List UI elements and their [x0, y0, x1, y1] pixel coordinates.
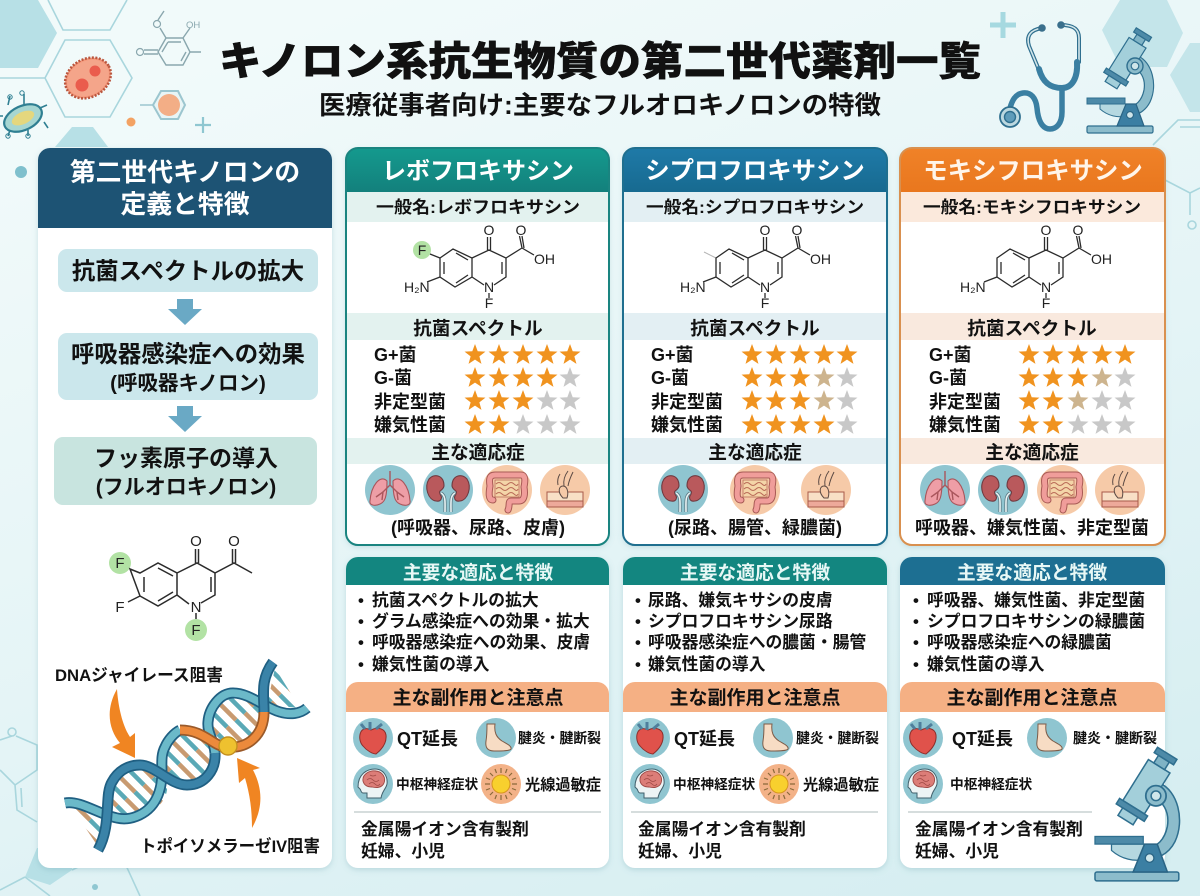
card border [623, 148, 887, 545]
arrow: gyrase target [110, 689, 135, 758]
feature list: シプロフロキサシン尿路 [648, 612, 833, 631]
section: main indications [346, 438, 609, 464]
section: main indications: 主な適応症 [431, 442, 525, 463]
label: DNA gyrase inhibition: DNAジャイレース阻害 [55, 665, 223, 685]
feature list: 嫌気性菌の導入 [927, 655, 1045, 674]
star ratings: 嫌気性菌 [929, 414, 1001, 435]
decoration: top-right hexagons and molecule lines [990, 0, 1200, 229]
arrow [168, 406, 202, 432]
side effect: photosensitivity: 光線過敏症 [525, 776, 601, 794]
card border [900, 148, 1165, 545]
chemical structure: O [484, 222, 495, 238]
panel: levofloxacin indications and side effects [346, 557, 609, 868]
chemical structure: fluoroquinolone: O [228, 533, 240, 550]
chemical structure: O [516, 222, 527, 238]
precautions [361, 819, 529, 861]
chemical structure: F [761, 295, 769, 311]
precautions [915, 819, 1083, 861]
indication caption: 呼吸器、嫌気性菌、非定型菌 [915, 517, 1149, 538]
feature list: • [358, 612, 364, 631]
feature list: 呼吸器、嫌気性菌、非定型菌 [927, 591, 1145, 610]
indication caption: (呼吸器、尿路、皮膚) [391, 518, 565, 538]
feature list: • [913, 612, 919, 631]
icon: microscope lower right [1095, 745, 1181, 881]
chemical structure: N [760, 279, 770, 295]
generic name: 一般名:モキシフロキサシン [923, 198, 1141, 217]
subtitle: 医療従事者向け:主要なフルオロキノロンの特徴 [319, 92, 882, 120]
feature list [358, 591, 590, 674]
chemical structure: H₂N [404, 279, 430, 295]
panel: moxifloxacin [900, 148, 1165, 545]
panel: ciprofloxacin [623, 148, 887, 545]
side effect: tendon rupture: 腱炎・腱断裂 [518, 730, 601, 746]
chemical structure: O [792, 222, 803, 238]
heading: side effects: 主な副作用と注意点 [946, 687, 1118, 709]
section: antibacterial spectrum [623, 313, 887, 340]
chemical structure [680, 222, 831, 311]
generic name [623, 192, 887, 222]
heading: indications [900, 557, 1165, 585]
panel: levofloxacin [346, 148, 609, 545]
star ratings: G+菌 [374, 345, 417, 365]
heading: side effects: 主な副作用と注意点 [392, 687, 564, 709]
DNA helix diagram [64, 658, 310, 853]
section: main indications: 主な適応症 [708, 442, 802, 463]
drug name header [900, 148, 1165, 192]
star ratings: G-菌 [929, 368, 967, 388]
arrow: topoisomerase target [237, 758, 260, 828]
feature list: 呼吸器感染症への効果、皮膚 [372, 632, 590, 652]
side effect: tendon rupture: 腱炎・腱断裂 [1073, 730, 1157, 746]
side effect: photosensitivity: 光線過敏症 [803, 776, 879, 794]
panel heading: 定義と特徴 [120, 190, 250, 219]
precautions: 妊婦、小児 [361, 842, 445, 861]
card border [346, 148, 609, 545]
feature list: • [635, 655, 641, 674]
star ratings: 非定型菌 [651, 392, 723, 412]
drug name header [623, 148, 887, 192]
feature list: • [635, 633, 641, 652]
heading: side effects [346, 682, 609, 712]
precautions: 金属陽イオン含有製剤 [915, 819, 1083, 839]
box: spectrum expansion: 抗菌スペクトルの拡大 [72, 258, 304, 284]
feature list: 尿路、嫌気キサシの皮膚 [648, 590, 833, 610]
generic name [346, 192, 609, 222]
side effect: QT prolongation [353, 718, 458, 758]
chemical structure: fluoroquinolone: O [190, 533, 202, 550]
side effect: QT prolongation [903, 718, 1013, 758]
star ratings [651, 344, 857, 435]
feature list: 嫌気性菌の導入 [648, 655, 766, 674]
generic name: 一般名:レボフロキサシン [376, 198, 580, 217]
heading: side effects [900, 682, 1165, 712]
chemical structure [960, 222, 1112, 311]
decoration: bottom-left hexagons and molecule lines [0, 728, 140, 896]
drug name header: シプロフロキサシン [645, 158, 865, 185]
feature list: • [913, 591, 919, 610]
feature list [635, 590, 866, 674]
box: respiratory effect: (呼吸器キノロン) [110, 372, 266, 395]
indication icons [365, 465, 590, 515]
heading: indications [623, 557, 887, 585]
indication caption: (尿路、腸管、緑膿菌) [668, 517, 842, 538]
section: main indications [623, 438, 887, 464]
box: fluorine introduction: (フルオロキノロン) [96, 476, 276, 499]
feature list: • [358, 591, 364, 610]
precautions: 金属陽イオン含有製剤 [361, 819, 529, 839]
precautions [638, 819, 806, 861]
heading: side effects: 主な副作用と注意点 [669, 687, 841, 709]
heading: indications: 主要な適応と特徴 [680, 562, 830, 583]
box: fluorine introduction [54, 437, 317, 505]
indication icons [920, 465, 1145, 515]
section: main indications [900, 438, 1165, 464]
generic name: 一般名:シプロフロキサシン [646, 198, 864, 217]
arrow [168, 299, 202, 325]
feature list: • [635, 612, 641, 631]
title: キノロン系抗生物質の第二世代薬剤一覧 [219, 40, 981, 84]
chemical structure: OH [1091, 251, 1112, 267]
side effect: tendon rupture [1027, 718, 1157, 758]
section: antibacterial spectrum [900, 313, 1165, 340]
section: antibacterial spectrum: 抗菌スペクトル [967, 318, 1097, 339]
feature list: • [358, 655, 364, 674]
box: respiratory effect: 呼吸器感染症への効果 [71, 341, 305, 367]
panel: definition and features [38, 148, 332, 868]
icon: microscope [1087, 26, 1155, 133]
precautions: 金属陽イオン含有製剤 [638, 819, 806, 839]
side effect: CNS symptoms: 中枢神経症状 [673, 776, 755, 792]
chemical structure [404, 222, 555, 311]
feature list: 抗菌スペクトルの拡大 [372, 591, 539, 610]
section: antibacterial spectrum [346, 313, 609, 340]
side effect: QT prolongation: QT延長 [674, 729, 735, 749]
box: spectrum expansion [58, 249, 318, 292]
feature list: • [358, 633, 364, 652]
chemical structure: F [1042, 295, 1050, 311]
side effect: QT prolongation: QT延長 [952, 729, 1013, 749]
feature list [913, 591, 1145, 674]
precautions: 妊婦、小児 [915, 842, 999, 861]
icon: stethoscope [1000, 21, 1079, 129]
heading: side effects [623, 682, 887, 712]
drug name header: モキシフロキサシン [923, 158, 1143, 185]
drug name header [346, 148, 609, 192]
chemical structure: O [760, 222, 771, 238]
star ratings: 非定型菌 [929, 392, 1001, 412]
box: fluorine introduction: フッ素原子の導入 [94, 445, 278, 471]
decoration: top-left hexagons and molecules [0, 0, 211, 178]
star ratings [929, 344, 1135, 435]
star ratings: 嫌気性菌 [651, 414, 723, 435]
star ratings: 非定型菌 [374, 392, 446, 412]
side effect: photosensitivity [481, 764, 601, 804]
generic name [900, 192, 1165, 222]
feature list: • [913, 655, 919, 674]
star ratings: G-菌 [374, 368, 412, 388]
side effect: tendon rupture: 腱炎・腱断裂 [796, 730, 879, 746]
icon: bacterium [0, 91, 48, 138]
feature list: 呼吸器感染症への膿菌・腸管 [648, 632, 866, 652]
star ratings: 嫌気性菌 [374, 414, 446, 435]
star ratings: G+菌 [929, 345, 972, 365]
heading: indications: 主要な適応と特徴 [957, 562, 1107, 583]
side effect: tendon rupture [753, 718, 879, 758]
decoration: top-left hexagons and molecules: OH [186, 20, 200, 31]
heading: indications [346, 557, 609, 585]
star ratings [374, 344, 580, 435]
panel: ciprofloxacin indications and side effects [623, 557, 887, 868]
section: main indications: 主な適応症 [985, 442, 1079, 463]
side effect: QT prolongation [630, 718, 735, 758]
section: antibacterial spectrum: 抗菌スペクトル [413, 318, 543, 339]
side effect: tendon rupture [476, 718, 601, 758]
chemical structure: OH [810, 251, 831, 267]
chemical structure: F [418, 242, 426, 258]
chemical structure: OH [534, 251, 555, 267]
side effect: CNS symptoms [903, 764, 1032, 804]
side effect: photosensitivity [759, 764, 879, 804]
feature list: • [913, 633, 919, 652]
indication icons [658, 465, 851, 515]
chemical structure: fluoroquinolone: F [191, 622, 201, 639]
feature list: グラム感染症への効果・拡大 [372, 611, 590, 631]
chemical structure: F [485, 295, 493, 311]
chemical structure: fluoroquinolone: F [115, 555, 125, 572]
side effect: CNS symptoms: 中枢神経症状 [396, 776, 478, 792]
star ratings: G+菌 [651, 345, 694, 365]
chemical structure: fluoroquinolone: F [115, 599, 125, 616]
feature list: 嫌気性菌の導入 [372, 655, 490, 674]
star ratings: G-菌 [651, 368, 689, 388]
feature list: シプロフロキサシンの緑膿菌 [927, 612, 1145, 631]
side effect: QT prolongation: QT延長 [397, 729, 458, 749]
chemical structure: O [1041, 222, 1052, 238]
feature list: • [635, 591, 641, 610]
chemical structure: fluoroquinolone: N [191, 599, 201, 616]
icon: cell [58, 50, 118, 106]
chemical structure: H₂N [680, 279, 706, 295]
heading: indications: 主要な適応と特徴 [403, 562, 553, 583]
chemical structure: fluoroquinolone [109, 533, 252, 641]
side effect: CNS symptoms [353, 764, 478, 804]
section: antibacterial spectrum: 抗菌スペクトル [690, 318, 820, 339]
chemical structure: O [1073, 222, 1084, 238]
side effect: CNS symptoms: 中枢神経症状 [950, 776, 1032, 792]
chemical structure: H₂N [960, 279, 986, 295]
panel: moxifloxacin indications and side effects [900, 557, 1165, 868]
label: topoisomerase IV inhibition: トポイソメラーゼIV阻害 [140, 836, 320, 856]
drug name header: レボフロキサシン [382, 158, 574, 185]
chemical structure: N [484, 279, 494, 295]
precautions: 妊婦、小児 [638, 842, 722, 861]
feature list: 呼吸器感染症への緑膿菌 [927, 632, 1112, 652]
box: respiratory effect [58, 333, 318, 400]
panel heading [38, 148, 332, 228]
side effect: CNS symptoms [630, 764, 755, 804]
chemical structure: N [1041, 279, 1051, 295]
panel heading: 第二世代キノロンの [70, 158, 300, 187]
